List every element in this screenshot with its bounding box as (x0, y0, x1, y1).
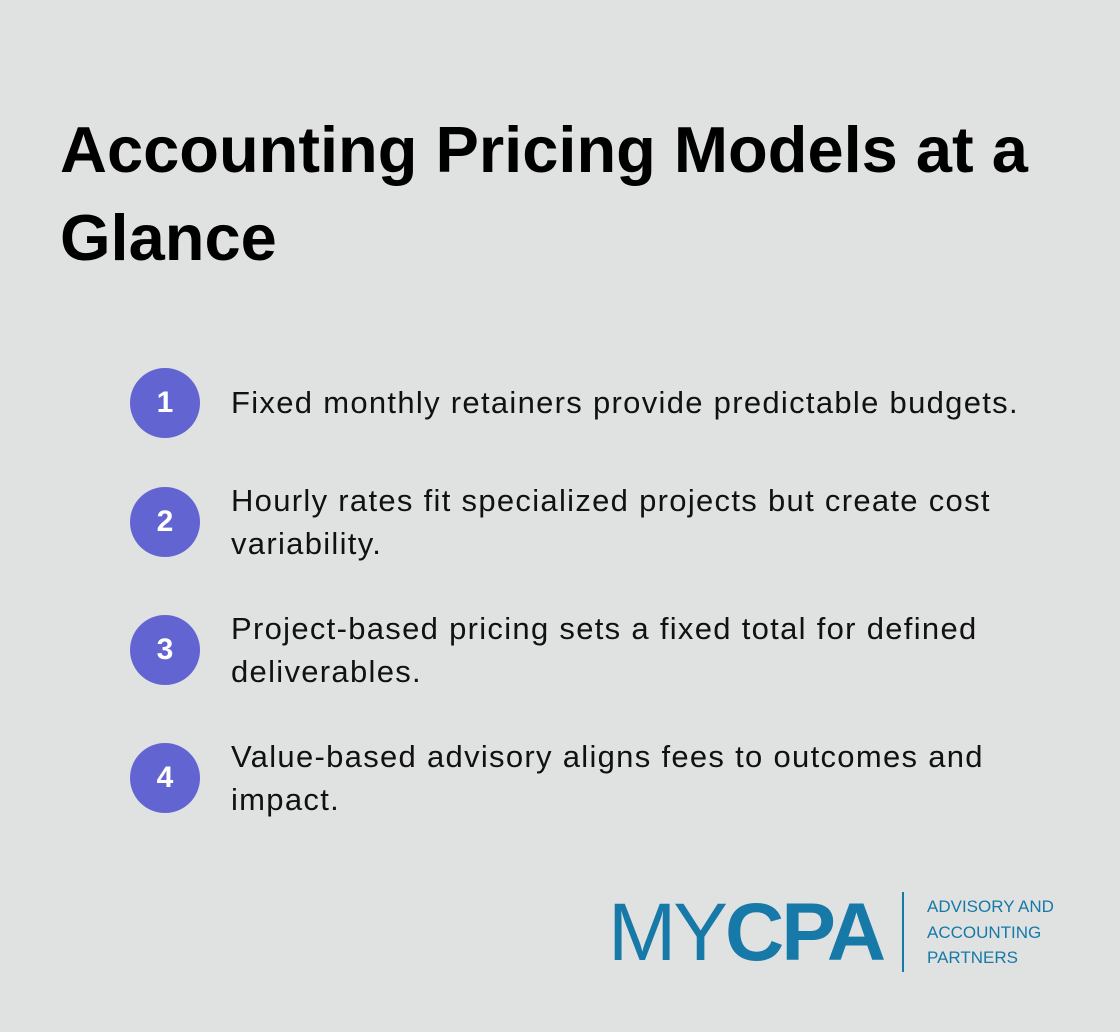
item 1 (130, 368, 1019, 438)
text 1: Fixed monthly retainers provide predictable budgets. (231, 385, 1019, 420)
item 2 (130, 483, 991, 561)
logo tagline: ADVISORY AND (927, 897, 1054, 916)
badge 2 (130, 487, 200, 557)
badge 4: 4 (157, 761, 173, 794)
badge 3: 3 (157, 633, 173, 666)
text 4: Value-based advisory aligns fees to outcomes and impact. (231, 739, 984, 817)
badge 1 (130, 368, 200, 438)
logo wordmark: MYCPA (608, 887, 883, 978)
logo (608, 887, 1054, 978)
title: Accounting Pricing Models at a Glance (60, 113, 1028, 274)
badge 3 (130, 615, 200, 685)
text 2: Hourly rates fit specialized projects but create cost variability. (231, 483, 991, 561)
badge 2: 2 (157, 505, 173, 538)
logo tagline: ACCOUNTING (927, 922, 1041, 942)
badge 4 (130, 743, 200, 813)
badge 1: 1 (157, 386, 173, 419)
item 3 (130, 611, 978, 689)
logo tagline (927, 897, 1054, 967)
logo tagline: PARTNERS (927, 948, 1018, 967)
item 4 (130, 739, 984, 817)
text 3: Project-based pricing sets a fixed total for defined deliverables. (231, 611, 978, 689)
